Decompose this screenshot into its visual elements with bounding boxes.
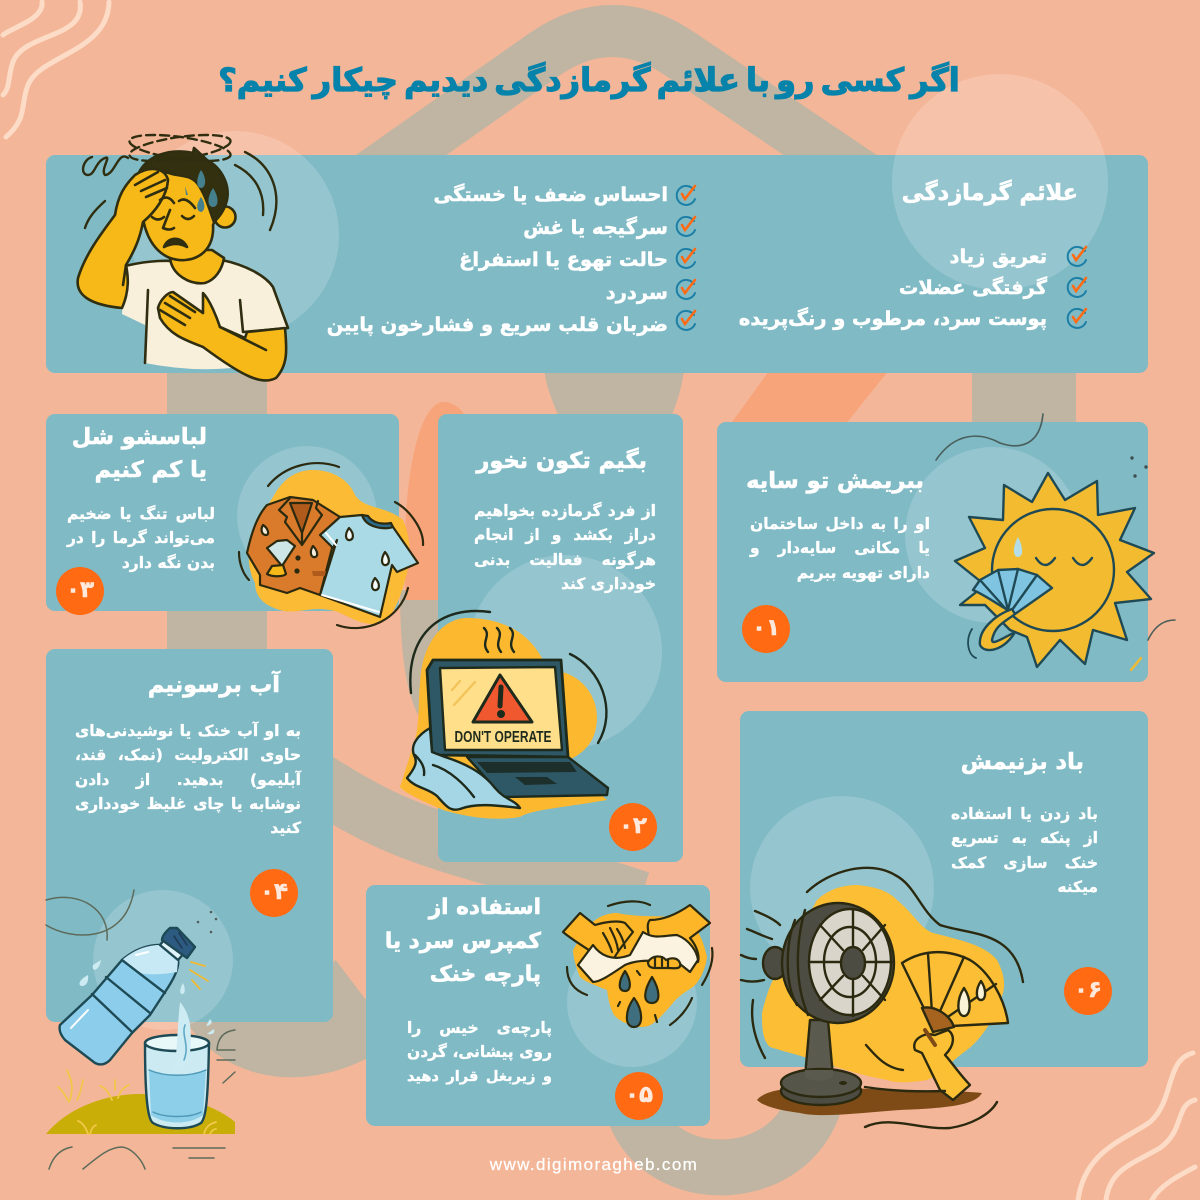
list: symptoms right column: پوست سرد، مرطوب و رنگ‌پریده — [739, 307, 1047, 330]
text block: روی پیشانی، گردن — [407, 1043, 552, 1061]
text block — [474, 502, 656, 594]
text block: به او آب خنک یا نوشیدنی‌های — [75, 722, 301, 740]
icon: dizzy sweating man — [78, 130, 288, 380]
badge 06 — [1064, 967, 1112, 1015]
heading: آب برسونیم — [148, 672, 280, 698]
panel: 05 cold compress — [366, 885, 710, 1126]
text block: نوشابه یا چای غلیظ خودداری — [75, 795, 301, 813]
badge 04: ۰۴ — [260, 879, 288, 905]
panel: heat exhaustion symptoms — [46, 155, 1148, 373]
icon: sun holding a fan — [936, 414, 1175, 670]
text block: آبلیمو) بدهید. از دادن — [75, 771, 301, 789]
icon: hands wringing a wet cloth — [563, 901, 713, 1027]
badge 04 — [250, 869, 298, 917]
text block: لباس تنگ یا ضخیم — [67, 505, 215, 523]
text block — [951, 805, 1098, 896]
heading: کمپرس سرد یا — [385, 928, 541, 954]
text block: میکنه — [1057, 878, 1098, 896]
heading — [385, 895, 542, 987]
text block: خودداری کند — [561, 575, 656, 593]
text block: دارای تهویه ببریم — [797, 564, 930, 582]
text block: خنک سازی کمک — [951, 854, 1098, 872]
badge 05 — [615, 1072, 663, 1120]
list: symptoms right column: گرفتگی عضلات — [899, 276, 1047, 299]
panel: 04 give water — [46, 649, 333, 1022]
badge 01: ۰۱ — [752, 615, 780, 641]
footer: website: www.digimoragheb.com — [490, 1155, 698, 1174]
text block: هرگونه فعالیت بدنی — [474, 551, 656, 569]
title: اگر کسی رو با علائم گرمازدگی دیدیم چیکار کنیم؟ — [218, 61, 960, 99]
text block: کنید — [270, 819, 301, 837]
panel: 03 loosen clothes — [46, 414, 399, 611]
list: symptoms right column: تعریق زیاد — [950, 245, 1047, 268]
list: symptoms left column: ضربان قلب سریع و فشارخون پایین — [327, 313, 668, 336]
badge 05: ۰۵ — [625, 1082, 653, 1108]
icon: desk fan and hand fan — [741, 868, 1023, 1128]
heading — [72, 424, 207, 483]
text block: حاوی الکترولیت (نمک، قند، — [75, 746, 301, 764]
badge 02: ۰۲ — [619, 813, 647, 839]
list: symptoms left column: احساس ضعف یا خستگی — [434, 183, 668, 206]
text block: از پنکه به تسریع — [951, 829, 1098, 847]
badge 01 — [742, 605, 790, 653]
list: symptoms left column: سردرد — [606, 280, 668, 304]
text block — [75, 721, 302, 837]
heading: symptoms: علائم گرمازدگی — [902, 180, 1078, 206]
icon: overheated laptop: DON'T OPERATE — [454, 729, 552, 746]
text block: بدن نگه دارد — [122, 554, 215, 572]
icons: check marks — [677, 186, 1086, 330]
heading: یا کم کنیم — [95, 457, 207, 483]
panel: 01 move to shade — [717, 422, 1148, 682]
list: symptoms left column: حالت تهوع یا استفراغ — [459, 248, 668, 271]
icon: bottle pouring water into a glass — [46, 890, 235, 1169]
text block: دراز بکشد و از انجام — [474, 526, 656, 544]
heading: استفاده از — [429, 895, 541, 920]
text block: او را به داخل ساختمان — [750, 515, 930, 533]
text block: یا مکانی سایه‌دار و — [750, 539, 930, 557]
heading: لباسشو شل — [72, 424, 207, 450]
text block — [749, 515, 930, 582]
text block — [407, 1019, 552, 1085]
badge 06: ۰۶ — [1074, 977, 1102, 1003]
text block: پارچه‌ی خیس را — [407, 1019, 552, 1037]
text block: می‌تواند گرما را در — [67, 529, 215, 547]
badge 03: ۰۳ — [66, 577, 94, 603]
badge 02 — [609, 803, 657, 851]
heading: پارچه خنک — [430, 962, 541, 987]
icon: jacket and t-shirt — [239, 463, 423, 628]
icon: overheated laptop — [400, 611, 608, 819]
panel: 06 fan the person — [740, 711, 1148, 1067]
list: symptoms right column — [739, 245, 1048, 330]
text block: از فرد گرمازده بخواهیم — [474, 502, 656, 520]
list: symptoms left column: سرگیجه یا غش — [523, 216, 668, 238]
text block: باد زدن یا استفاده — [951, 805, 1098, 823]
badge 03 — [56, 567, 104, 615]
heading: باد بزنیمش — [961, 749, 1084, 775]
heading: ببریمش تو سایه — [746, 468, 924, 494]
list: symptoms left column — [327, 183, 668, 336]
text block: و زیربغل قرار دهید — [407, 1068, 552, 1085]
heading: بگیم تکون نخور — [476, 448, 647, 474]
text block — [66, 504, 215, 572]
panel: 02 do not move — [438, 414, 683, 862]
